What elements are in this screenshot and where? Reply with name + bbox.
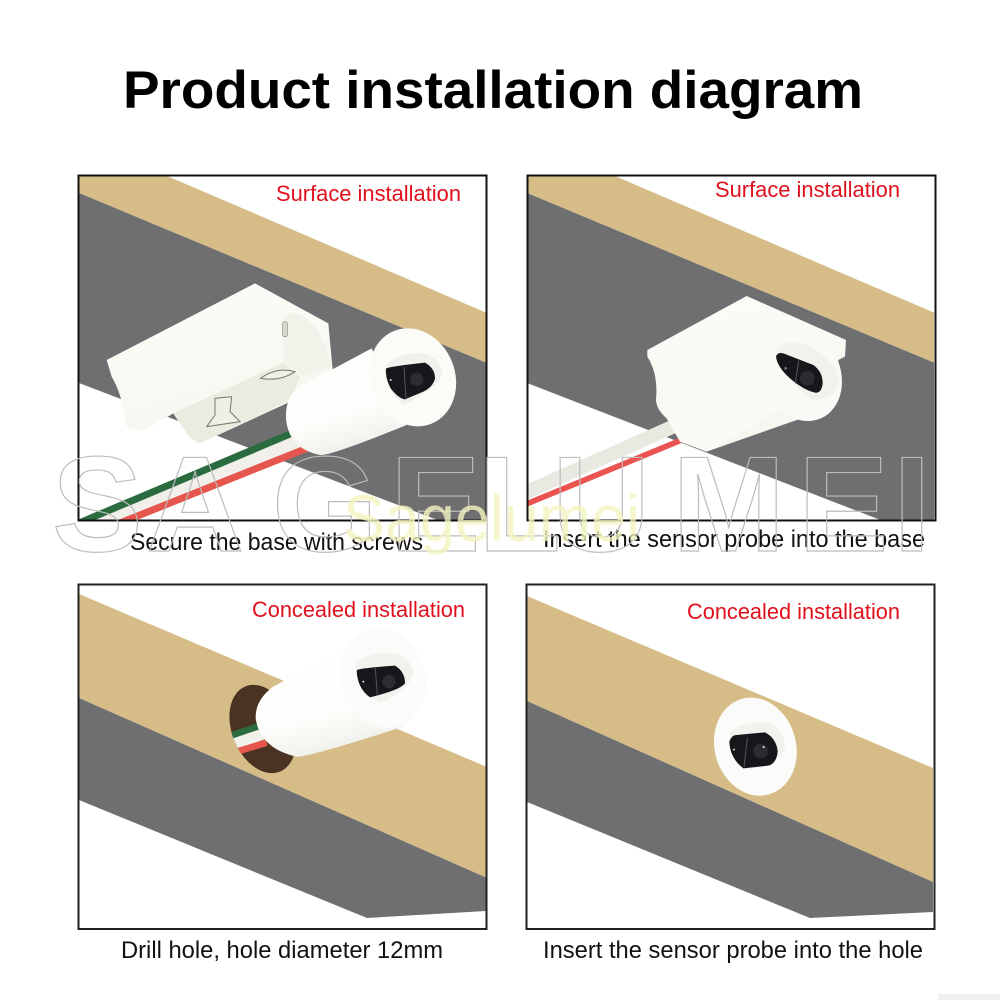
label: Concealed installation bbox=[252, 597, 465, 622]
caption: drill hole: Drill hole, hole diameter 12mm bbox=[121, 937, 443, 964]
mounting base bbox=[107, 283, 333, 443]
watermark: outlined brand: SAGELUMEI bbox=[52, 428, 931, 580]
wall band: wood bbox=[79, 176, 487, 363]
screw bbox=[261, 370, 295, 379]
panel: surface installation, insert probe bbox=[520, 176, 936, 521]
wires bbox=[77, 433, 307, 530]
wall band: wood bbox=[79, 594, 487, 878]
title: Product installation diagram bbox=[123, 61, 863, 120]
wires bbox=[224, 726, 267, 754]
screw bbox=[207, 397, 240, 427]
panel: concealed installation, probe inserted bbox=[526, 584, 934, 929]
wall band: wood bbox=[527, 596, 933, 882]
wall band: wood bbox=[527, 176, 935, 363]
wall band: gray bbox=[527, 193, 935, 521]
wall band: gray bbox=[79, 698, 487, 918]
caption: insert into hole: Insert the sensor probe into the hole bbox=[543, 937, 923, 964]
caption: secure the base: Secure the base with screws bbox=[130, 529, 423, 556]
label: Surface installation bbox=[715, 177, 900, 202]
watermark: yellow brand: Sagelumei bbox=[343, 481, 640, 555]
sensor probe bbox=[286, 328, 456, 455]
sensor probe bbox=[256, 652, 414, 757]
wires bbox=[520, 425, 680, 507]
label: Surface installation bbox=[276, 181, 461, 206]
mounted base with probe bbox=[647, 296, 857, 452]
wall band: gray bbox=[79, 193, 487, 521]
label: Concealed installation bbox=[687, 599, 900, 624]
caption: insert into base: Insert the sensor probe into the base bbox=[543, 526, 925, 553]
wall band: gray bbox=[527, 701, 933, 918]
panel: concealed installation, drill hole bbox=[78, 584, 487, 929]
corner mark sliver bbox=[938, 994, 1000, 1000]
drilled hole bbox=[229, 684, 294, 774]
panel: surface installation, secure base bbox=[77, 176, 487, 530]
sensor probe flange bbox=[714, 698, 797, 796]
